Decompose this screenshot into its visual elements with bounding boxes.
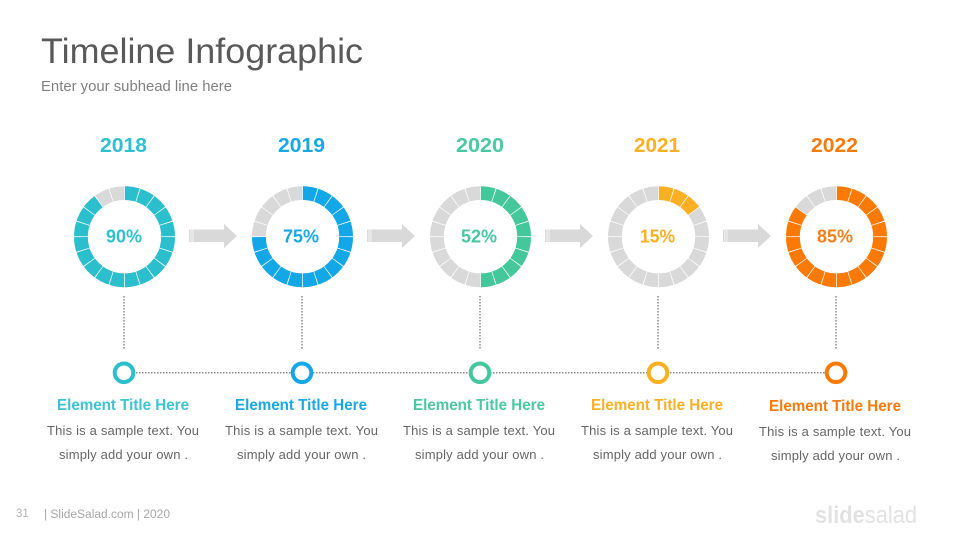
element title: Element Title Here	[57, 397, 189, 414]
year 2018: 2018	[100, 135, 147, 157]
body text	[47, 423, 199, 462]
body text: This is a sample text. You	[225, 423, 378, 438]
column: 2022	[759, 135, 911, 463]
body text: simply add your own .	[771, 448, 900, 463]
node marker	[649, 364, 667, 382]
donut chart 90%	[81, 193, 168, 280]
body text: This is a sample text. You	[47, 423, 199, 438]
vertical connector	[835, 296, 837, 350]
vertical connector	[657, 296, 659, 350]
donut chart 75%: 75%	[283, 226, 319, 246]
body text: simply add your own .	[59, 447, 188, 462]
timeline dotted line	[136, 372, 825, 374]
title: Timeline Infographic	[41, 32, 363, 71]
body text	[759, 424, 911, 463]
year 2021: 2021	[634, 135, 680, 157]
year 2022: 2022	[811, 135, 858, 157]
body text	[581, 423, 733, 462]
body text: This is a sample text. You	[759, 424, 911, 439]
column: 2018	[47, 135, 199, 462]
donut chart 52%	[437, 193, 524, 280]
donut chart 90%: 90%	[106, 226, 142, 246]
body text: simply add your own .	[415, 447, 544, 462]
donut chart 85%: 85%	[817, 226, 853, 246]
year 2020: 2020	[456, 135, 504, 157]
element title: Element Title Here	[591, 397, 723, 414]
subhead: Enter your subhead line here	[41, 78, 232, 95]
vertical connector	[123, 296, 125, 350]
arrow 4	[723, 224, 771, 248]
column: 2021	[581, 135, 733, 462]
year 2019: 2019	[278, 135, 325, 157]
arrow 3	[545, 224, 593, 248]
body text: simply add your own .	[593, 447, 722, 462]
donut chart 15%	[615, 193, 702, 280]
column: 2020	[403, 135, 555, 462]
donut chart 15%: 15%	[640, 226, 675, 246]
node marker	[115, 364, 133, 382]
body text	[403, 423, 555, 462]
body text	[225, 423, 378, 462]
body text: This is a sample text. You	[581, 423, 733, 438]
arrow 2	[367, 224, 415, 248]
vertical connector	[479, 296, 481, 350]
element title: Element Title Here	[413, 397, 545, 414]
column: 2019	[225, 135, 378, 462]
arrow 1	[189, 224, 237, 248]
node marker	[827, 364, 845, 382]
element title: Element Title Here	[235, 397, 367, 414]
donut chart 85%	[793, 193, 880, 280]
footer text: | SlideSalad.com | 2020	[44, 509, 170, 521]
body text: simply add your own .	[237, 447, 366, 462]
body text: This is a sample text. You	[403, 423, 555, 438]
donut chart 52%: 52%	[461, 226, 497, 246]
vertical connector	[301, 296, 303, 350]
node marker	[293, 364, 311, 382]
page number: 31	[16, 508, 29, 520]
donut chart 75%	[259, 193, 346, 280]
element title: Element Title Here	[769, 398, 901, 415]
node marker	[471, 364, 489, 382]
logo: slidesalad: slidesalad	[815, 502, 917, 529]
